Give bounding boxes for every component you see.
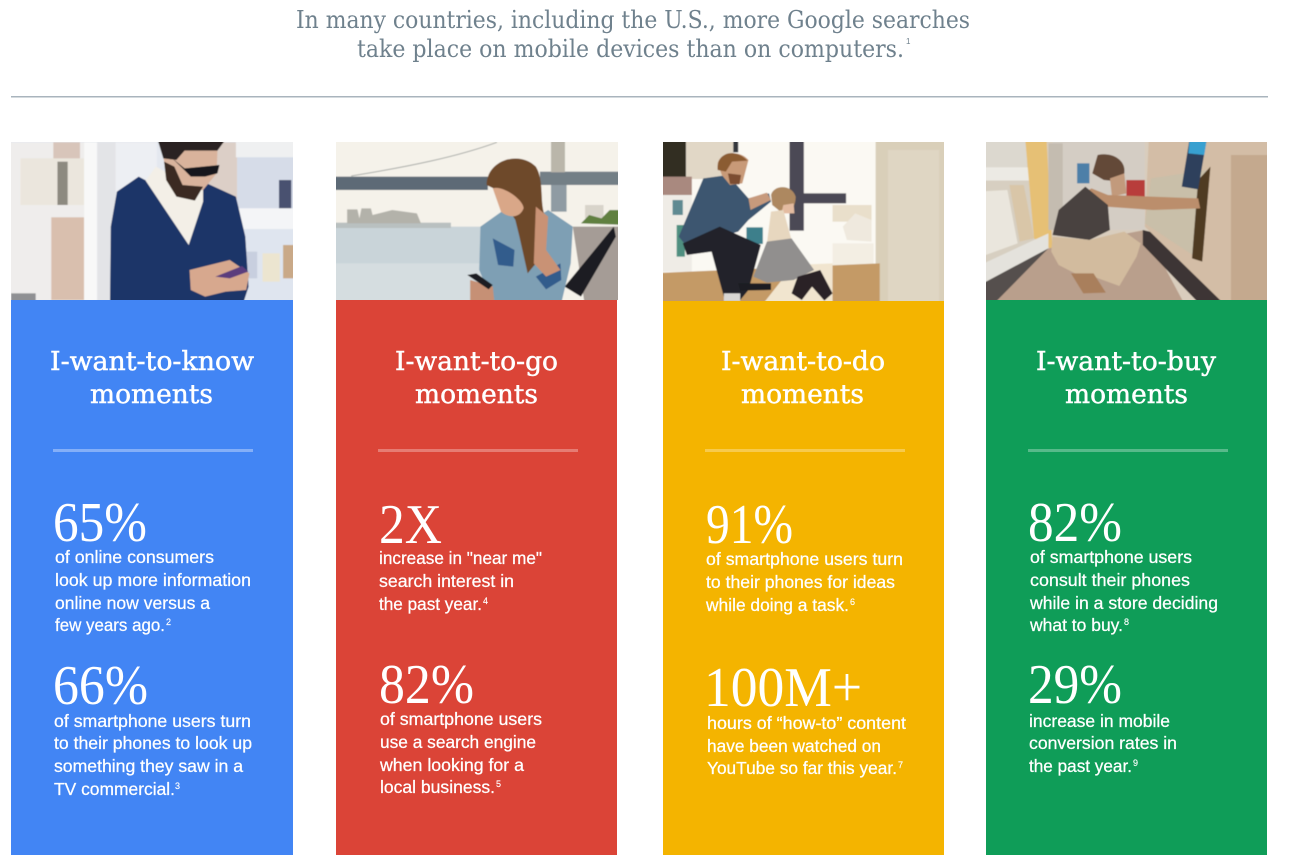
panel: I-want-to-know moments <box>0 137 304 855</box>
panel background: red <box>336 300 617 855</box>
stat: 91% of smartphone users: 91% <box>706 494 793 556</box>
stat: 82% of smartphone users consult phones <box>1028 492 1218 635</box>
stat: 82% of smartphone users consult phones: consult their phones <box>1030 570 1190 590</box>
stat: 29% increase in mobile conversion: 29% <box>1028 654 1122 716</box>
heading: I-want-to-do moments: moments <box>741 380 864 410</box>
stat: 66% of smartphone users: to their phones to look up <box>54 733 252 753</box>
heading: I-want-to-go moments <box>395 347 558 410</box>
stat: 2X increase in near me: search interest in <box>379 571 514 591</box>
panel background: yellow <box>663 301 944 855</box>
stat: 2X increase in near me: 4 <box>483 596 488 606</box>
stat: 100M+ hours of how-to content: 7 <box>898 760 903 770</box>
stat: 29% increase in mobile conversion: the past year. <box>1029 756 1132 776</box>
heading: I-want-to-go moments: moments <box>415 380 538 410</box>
heading: I-want-to-know moments <box>50 347 254 410</box>
stat: 82% of smartphone users: local business. <box>380 777 495 797</box>
panel background: green <box>986 300 1267 855</box>
stat: 65% of online consumers: few years ago. <box>55 615 165 635</box>
stat: 82% of smartphone users consult phones: what to buy. <box>1029 615 1123 635</box>
stat: 65% of online consumers <box>53 492 251 635</box>
stat: 66% of smartphone users: 66% <box>53 655 148 717</box>
title: intro statement: In many countries, including the U.S., more Google searches <box>296 6 970 34</box>
stat: 2X increase in near me: increase in "near me" <box>379 548 542 568</box>
stat: 82% of smartphone users consult phones: 8 <box>1124 617 1129 627</box>
stat: 82% of smartphone users consult phones: of smartphone users <box>1030 547 1192 567</box>
stat: 65% of online consumers: 2 <box>166 617 171 627</box>
heading: I-want-to-know moments: I-want-to-know <box>50 347 254 377</box>
stat: 29% increase in mobile conversion: 9 <box>1133 758 1138 768</box>
title: intro statement <box>296 6 970 63</box>
stat: 82% of smartphone users consult phones: while in a store deciding <box>1029 593 1218 613</box>
photo: woman on waterfront with phone <box>336 142 618 300</box>
panel: I-want-to-buy moments <box>977 137 1276 855</box>
photo: man with cardigan using phone <box>11 142 293 300</box>
stat: 100M+ hours of how-to content: 100M+ <box>704 657 862 719</box>
panel: I-want-to-go moments <box>327 137 626 855</box>
heading: I-want-to-go moments: I-want-to-go <box>395 347 558 377</box>
panel background: blue <box>11 300 293 855</box>
stat: 82% of smartphone users: use a search engine <box>380 732 536 752</box>
stat: 66% of smartphone users <box>53 655 252 799</box>
heading: I-want-to-know moments: moments <box>90 380 213 410</box>
heading: I-want-to-do moments <box>721 347 885 410</box>
stat: 100M+ hours of how-to content <box>704 657 906 778</box>
stat: 100M+ hours of how-to content: YouTube so far this year. <box>707 758 897 778</box>
photo: father braiding daughter's hair <box>663 142 944 301</box>
stat: 100M+ hours of how-to content: hours of “how-to” content <box>707 713 906 733</box>
stat: 82% of smartphone users consult phones: 82% <box>1028 492 1122 554</box>
stat: 82% of smartphone users: when looking for a <box>379 755 524 775</box>
stat: 100M+ hours of how-to content: have been watched on <box>707 736 881 756</box>
heading: I-want-to-buy moments: I-want-to-buy <box>1036 347 1216 377</box>
stat: 66% of smartphone users: 3 <box>175 781 180 791</box>
stat: 2X increase in near me <box>379 494 542 614</box>
stat: 29% increase in mobile conversion: conversion rates in <box>1029 733 1177 753</box>
title: intro statement: take place on mobile devices than on computers. <box>357 35 904 63</box>
heading: I-want-to-do moments: I-want-to-do <box>721 347 885 377</box>
stat: 91% of smartphone users: 6 <box>850 597 855 607</box>
stat: 66% of smartphone users: of smartphone users turn <box>54 711 251 731</box>
stat: 2X increase in near me: the past year. <box>379 594 482 614</box>
stat: 65% of online consumers: of online consumers <box>55 547 214 567</box>
stat: 2X increase in near me: 2X <box>379 494 442 556</box>
stat: 91% of smartphone users: while doing a task. <box>705 595 849 615</box>
stat: 91% of smartphone users: of smartphone users turn <box>706 549 903 569</box>
stat: 66% of smartphone users: something they saw in a <box>54 756 243 776</box>
heading: I-want-to-buy moments <box>1036 347 1216 410</box>
stat: 82% of smartphone users <box>379 654 542 797</box>
stat: 65% of online consumers: online now versus a <box>55 593 210 613</box>
photo: woman crouching in store aisle <box>986 142 1267 300</box>
stat: 91% of smartphone users: to their phones for ideas <box>706 572 895 592</box>
stat: 82% of smartphone users: of smartphone users <box>380 709 542 729</box>
stat: 66% of smartphone users: TV commercial. <box>54 779 175 799</box>
stat: 65% of online consumers: 65% <box>53 492 147 554</box>
stat: 82% of smartphone users: 5 <box>496 779 501 789</box>
stat: 29% increase in mobile conversion: increase in mobile <box>1029 711 1170 731</box>
stat: 82% of smartphone users: 82% <box>379 654 474 716</box>
title: intro statement: 1 <box>906 37 911 46</box>
panel: I-want-to-do moments <box>650 137 954 855</box>
stat: 91% of smartphone users <box>705 494 903 615</box>
stat: 29% increase in mobile conversion <box>1028 654 1177 776</box>
heading: I-want-to-buy moments: moments <box>1065 380 1188 410</box>
stat: 65% of online consumers: look up more information <box>55 570 251 590</box>
